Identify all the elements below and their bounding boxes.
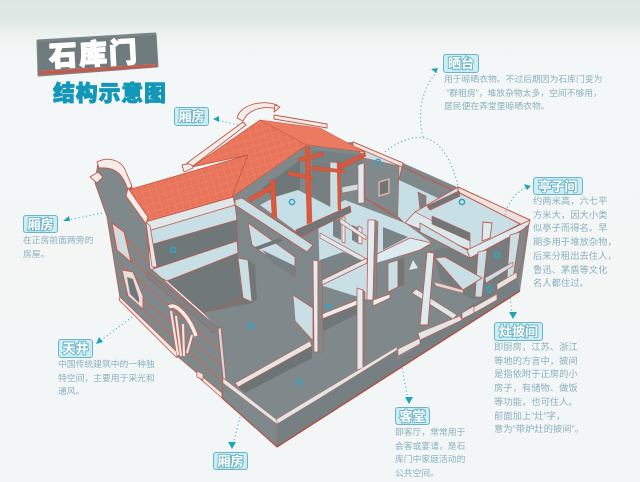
label: 厢房 bottom: 厢房 [217,451,244,470]
roofs [128,120,365,222]
central gallery light base [318,198,432,300]
text: 天井 description: 中国传统建筑中的一种独 特空间，主要用于采光和 通风。 [58,359,155,396]
text: 客堂 description: 即客厅，常常用于 会客或宴请，是石 库门中家庭活动的 公共空间。 [395,427,465,478]
subtitle: 结构示意图 [53,76,166,108]
text: 晒台 description: 用于晾晒衣物。不过后期因为石库门变为 “群租房”，堆放杂物太多，空间不够用， 居民便在弄堂里晾晒衣物。 [444,74,602,111]
front corner low walls [222,272,520,447]
lower right room [434,225,528,297]
label: 晒台 [443,54,479,73]
timber frame [248,147,366,224]
back courtyard floor and walls [260,150,364,232]
room markers [170,159,500,385]
label: 客堂: 客堂 [399,406,426,425]
title plate: 石库门 [48,31,138,75]
central gallery beams [296,206,457,325]
text: 厢房 description: 在正房前面两旁的 房屋。 [23,235,93,259]
text: 亭子间 description: 约两米高，六七平 方米大，因大小类 似亭子而得名。早 期多用于堆放杂物， 后来分租出去住人， 鲁迅、茅盾等文化 名人都住过。 [533,196,617,288]
main hall walls [145,197,323,381]
roof terrace room [353,142,457,223]
label: 天井: 天井 [62,338,88,357]
leader arrowheads [63,68,531,449]
label: 晒台: 晒台 [448,53,474,72]
building base floor [145,142,530,447]
upper right terrace [405,187,530,300]
label: 灶披间: 灶披间 [499,321,538,340]
label: 厢房 left: 厢房 [27,214,54,233]
ground floor low walls [235,294,390,393]
text: 灶披间 description: 即厨房，江苏、浙江 等地的方言中，披间 是指依附于正房的小 房子，有储物、做饭 等功能，也可住人。 前面加上“灶”字， 意为“带炉灶的披间”。 [494,342,584,434]
label: 厢房 top [174,107,209,126]
ground floor pillars [357,220,378,370]
cross wall between courtyard and hall [235,198,313,341]
gable ornaments [90,103,327,224]
left facade wall with windows and door [95,160,226,398]
dotted leader lines [68,72,527,445]
label: 天井 [58,339,93,358]
label: 亭子间: 亭子间 [538,176,578,195]
label: 厢房 top: 厢房 [178,106,204,125]
